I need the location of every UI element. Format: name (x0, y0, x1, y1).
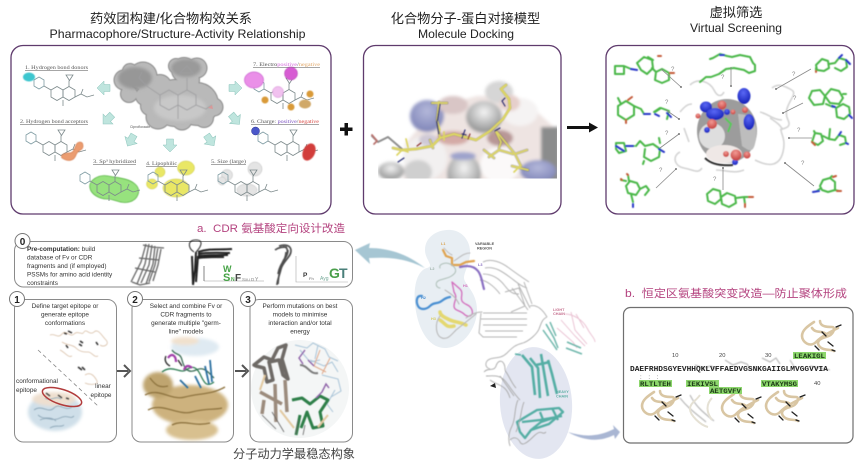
residue ticks and numbers (672, 353, 820, 387)
arrow: docking to screening (567, 122, 598, 132)
heavy chain ribbons (515, 354, 563, 438)
green peptide: LEAKIGL: LEAKIGL (794, 353, 825, 360)
region labels: L1 (441, 242, 445, 246)
sequence logo 2: Fh (309, 276, 314, 281)
arrows and question marks: ? (801, 161, 805, 167)
feature 4: lipophilic: 4. Lipophilic (146, 161, 178, 167)
green peptide: LEAKIGL (793, 352, 826, 360)
ligand upper right (809, 89, 852, 119)
central gray surface molecule (114, 57, 224, 130)
candidate ligands (615, 54, 852, 207)
step 2 text: CDR fragments to (160, 312, 212, 318)
region labels: H2 (421, 296, 426, 300)
CDR loop bundle (189, 240, 232, 285)
region labels: REGION (477, 246, 492, 250)
peptide sequence: DAEFRHDSGYEVHHQKLVFFAEDVGSNKGAIIGLMVGGVVIA (630, 366, 829, 374)
residue ticks and numbers: 30 (765, 353, 771, 359)
loop bundle (275, 245, 291, 285)
sequence logo 1 (203, 261, 264, 284)
arrows and question marks (656, 67, 814, 190)
step 2 text (150, 303, 223, 336)
ligand sticks (372, 85, 528, 172)
green peptide: AETGVFV: AETGVFV (710, 388, 741, 395)
pre-computation text: Pre-computation: build (27, 246, 96, 253)
title: pharmacophore: Pharmacophore/Structure-Activity Relationship (50, 27, 306, 41)
green peptide: VTAKYMSG: VTAKYMSG (762, 381, 797, 388)
sequence logo 2: G (329, 265, 340, 281)
step 3 text: Perform mutations on best (263, 303, 338, 310)
arrows and question marks: ? (665, 100, 669, 106)
step 3 text: interaction and/or total (268, 320, 332, 327)
arrow: heavy chain to constant region panel (568, 425, 620, 440)
sequence logo 1: F (235, 273, 241, 284)
region labels: HEAVY (556, 390, 569, 394)
panel: constant region mutations (624, 308, 853, 443)
heavy chain highlight (496, 345, 576, 461)
ligand bottom right (813, 176, 841, 192)
sequence logo 1: W (223, 264, 232, 274)
residue ticks and numbers: 40 (814, 381, 820, 387)
arrow: variable region to CDR design (355, 243, 425, 268)
feature 5: size large (211, 158, 278, 201)
region labels: H3 (431, 317, 436, 321)
heavy chain gray partner (484, 361, 546, 446)
arrows and question marks: ? (659, 168, 663, 174)
caption: molecular dynamics: 分子动力学最稳态构象 (233, 446, 355, 461)
step 1 text (32, 303, 99, 327)
step 2 text: Select and combine Fv or (150, 303, 223, 310)
step 3 text: energy (290, 328, 311, 336)
step 3 text: models to minimise (273, 312, 328, 318)
residue ticks and numbers: 20 (719, 353, 725, 359)
sequence logo 1: Sxu D (242, 277, 255, 282)
title: molecule docking (391, 10, 540, 41)
step 1 text: conformations (45, 320, 85, 327)
step badge 2 (128, 292, 142, 306)
title: virtual screening (690, 5, 782, 35)
feature 7: electropositive / negative: 7. Electro positive /negative (253, 62, 321, 68)
panel 2: germline models (128, 292, 234, 442)
arrows and question marks: ? (797, 128, 801, 134)
feature 3: sp3 hybridized: 3. Sp³ hybridized (93, 159, 136, 165)
step badge 0: 0 (20, 237, 26, 248)
step 2 text: line" models (169, 328, 203, 336)
step 2 text: generate multiple "germ- (151, 320, 221, 327)
arrows and question marks: ? (713, 177, 717, 183)
green peptide: IEKIVSL: IEKIVSL (687, 381, 718, 388)
label: linear epitope: linear (95, 383, 112, 390)
green peptide: AETGVFV (709, 387, 742, 395)
feature 3: sp3 hybridized (80, 159, 140, 202)
ligand top left (615, 56, 674, 83)
sequence logo 1: S (223, 272, 230, 284)
step badge 3: 3 (245, 295, 251, 306)
antibody structure (415, 230, 595, 461)
fab ribbons (479, 260, 547, 369)
gray background fibril (640, 358, 830, 422)
arrow: step 1 to 2 (117, 365, 130, 377)
feature 2: hydrogen bond acceptors: 2. Hydrogen bond acceptors (20, 119, 88, 125)
panel: molecule docking (364, 46, 561, 214)
light chain (523, 312, 595, 354)
region labels: CHAIN (553, 312, 565, 316)
ligand upper left (618, 97, 671, 123)
step badge 0 (15, 234, 30, 248)
feature 6: charge (251, 119, 320, 163)
feature 6: charge: 6. Charge: positive /negative (251, 119, 320, 125)
title: molecule docking: Molecule Docking (418, 27, 514, 41)
title: pharmacophore (50, 11, 306, 41)
sequence logo 2: Ayg (320, 276, 329, 282)
pre-computation text: database of Fv or CDR (27, 254, 93, 262)
region labels: LIGHT (553, 308, 565, 312)
step badge 1 (10, 292, 24, 306)
step 1 text: Define target epitope or (32, 303, 99, 310)
protein surface (378, 80, 557, 178)
panel: virtual screening (606, 46, 854, 214)
antigen with circled epitope (28, 384, 84, 431)
region labels: H1 (463, 284, 468, 288)
sequence logo 2: P (303, 272, 308, 279)
step badge 2: 2 (132, 295, 138, 306)
ligand bottom centre (707, 189, 753, 207)
CDR loops (417, 248, 484, 338)
title: virtual screening: 虚拟筛选 (710, 5, 762, 20)
step badge 3 (240, 292, 256, 306)
sequence alignment marks: : : : (640, 375, 661, 381)
label: linear epitope: epitope (91, 392, 112, 399)
pre-computation text (27, 246, 113, 287)
label: conformational epitope (16, 378, 58, 394)
sequence logo 2: T (339, 265, 348, 281)
ligand bottom left (621, 174, 649, 207)
arrows around the central molecule (97, 81, 245, 152)
step 1 text: generate epitope (41, 312, 89, 318)
feature 1: hydrogen bond donors (23, 65, 94, 106)
ligand lower left (616, 138, 664, 164)
title: virtual screening: Virtual Screening (690, 21, 782, 35)
protein receptor (675, 81, 794, 172)
ligand top centre (700, 54, 755, 82)
arrows and question marks: ? (671, 67, 675, 73)
feature 2: hydrogen bond acceptors (20, 119, 88, 161)
title: pharmacophore: 药效团构建/化合物构效关系 (90, 11, 252, 26)
mutated interface ribbons (251, 340, 349, 438)
arrows and question marks: ? (665, 131, 669, 137)
label: ciprofloxacin: Ciprofloxacin (130, 125, 150, 129)
title: molecule docking: 化合物分子-蛋白对接模型 (391, 10, 540, 26)
linear epitope conformations (50, 331, 107, 384)
region labels: VARIABLE (475, 242, 495, 246)
step badge 1: 1 (14, 295, 20, 306)
heading: a. CDR design: a. CDR 氨基酸定向设计改造 (197, 221, 345, 235)
sequence logo 2 (296, 256, 348, 282)
heading: b. constant region: b. 恒定区氨基酸突变改造—防止聚体形成 (625, 286, 847, 300)
panel 1: target epitope (10, 292, 116, 442)
feature 7: electropositive / negative (244, 62, 321, 110)
green peptide: RLTLTEH (639, 380, 672, 388)
green peptide: RLTLTEH: RLTLTEH (640, 381, 671, 388)
arrows and question marks: ? (721, 75, 725, 81)
label: conformational epitope: epitope (16, 387, 37, 394)
region labels: L3 (478, 263, 482, 267)
plus sign (340, 123, 352, 136)
arrow: step 2 to 3 (235, 365, 248, 377)
label: linear epitope (91, 383, 112, 399)
germline model ribbons (143, 337, 228, 440)
panel 0: pre-computation (14, 234, 352, 287)
green peptide: IEKIVSL (686, 380, 719, 388)
panel 3: mutations (240, 292, 352, 442)
ligand top right (816, 55, 850, 72)
pre-computation text: constraints (27, 280, 58, 287)
region labels (421, 242, 569, 398)
step 3 text (263, 303, 338, 336)
arrows and question marks: ? (793, 96, 797, 102)
Fv fragment bundle (131, 244, 164, 285)
sequence logo 1: N (231, 277, 235, 283)
feature 1: hydrogen bond donors: 1. Hydrogen bond donors (25, 65, 88, 71)
pre-computation text: PSSMs for amino acid identity (27, 272, 113, 278)
label: conformational epitope: conformational (16, 378, 58, 385)
pre-computation text: fragments and (if employed) (27, 263, 107, 270)
folded domains (642, 321, 841, 427)
ligand middle right (812, 129, 848, 145)
residue ticks and numbers: 10 (672, 353, 678, 359)
sequence logo 1: Y (255, 277, 259, 283)
feature 5: size large: 5. Size (large) (211, 158, 246, 165)
region labels: L2 (430, 267, 434, 271)
feature 4: lipophilic (146, 161, 208, 201)
region labels: CHAIN (556, 394, 568, 398)
variable region highlight (415, 230, 477, 348)
green peptide: VTAKYMSG (761, 380, 798, 388)
arrows and question marks: ? (792, 72, 796, 78)
